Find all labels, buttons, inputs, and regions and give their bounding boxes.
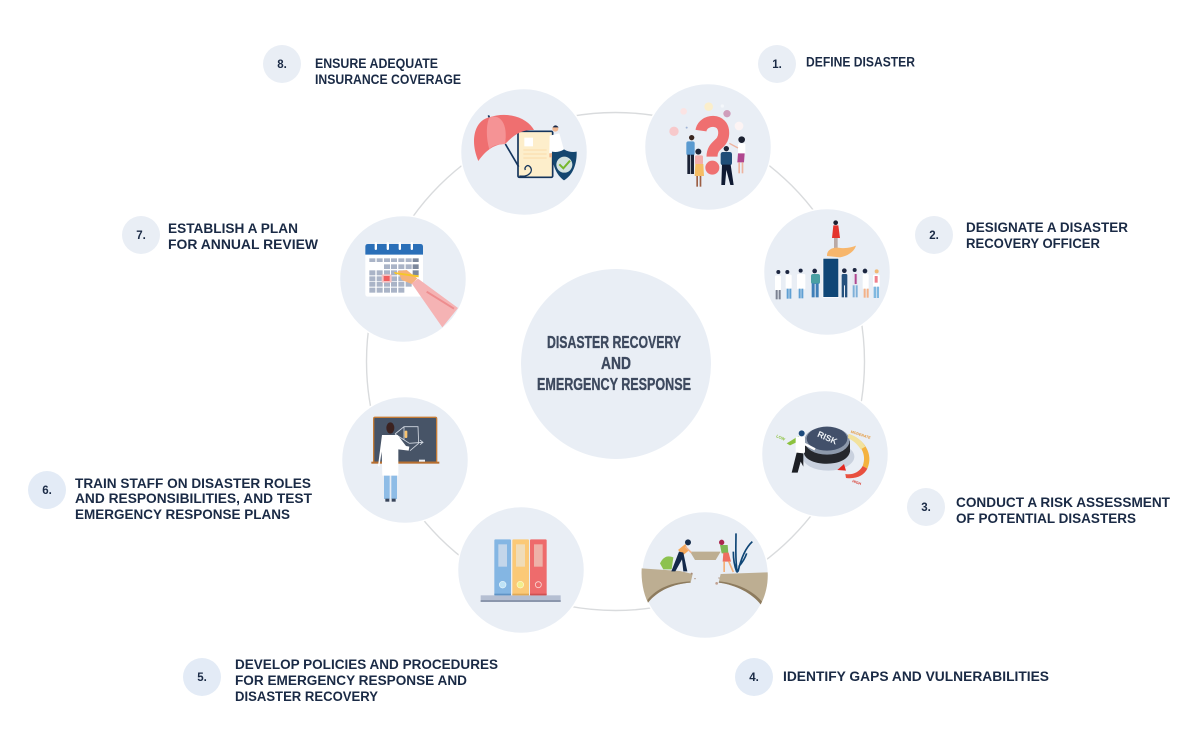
step 3: conduct a risk assessment <box>762 390 1171 526</box>
step 5: develop policies and procedures <box>183 506 584 704</box>
step 1: define disaster <box>644 45 915 210</box>
label 7: FOR ANNUAL REVIEW <box>168 237 318 252</box>
number badge 5: 5. <box>197 672 207 684</box>
central title: AND <box>601 353 631 373</box>
number badge 6: 6. <box>42 485 52 497</box>
icon: people around a question mark <box>669 102 745 187</box>
number badge 4: 4. <box>749 672 759 684</box>
label 8 <box>315 56 461 87</box>
step 7: establish a plan <box>122 216 466 342</box>
label 2 <box>966 220 1128 251</box>
icon: risk dial: MODERATE <box>850 430 872 440</box>
label 4: IDENTIFY GAPS AND VULNERABILITIES <box>783 669 1049 684</box>
number badge 2 <box>915 216 953 254</box>
icon: calendar and hand with pencil <box>365 242 458 327</box>
number badge 3: 3. <box>921 502 931 514</box>
circle 3 <box>762 390 888 518</box>
circle 5 <box>458 506 584 634</box>
step 2: designate a disaster recovery officer <box>764 208 1128 336</box>
number badge 1 <box>758 45 796 83</box>
central title: DISASTER RECOVERY <box>547 332 681 352</box>
circle 4 <box>642 512 768 638</box>
label 5 <box>235 657 498 704</box>
circle 8 <box>460 88 588 216</box>
label 8: INSURANCE COVERAGE <box>315 72 461 87</box>
connecting ring <box>366 112 864 610</box>
label 3: CONDUCT A RISK ASSESSMENT <box>956 495 1171 510</box>
central hub <box>521 269 711 459</box>
number badge 7 <box>122 216 160 254</box>
label 5: DEVELOP POLICIES AND PROCEDURES <box>235 657 498 672</box>
number badge 4 <box>735 658 773 696</box>
central title <box>537 332 691 394</box>
central title: EMERGENCY RESPONSE <box>537 374 691 394</box>
label 5: DISASTER RECOVERY <box>235 689 378 704</box>
icon: risk dial: LOW <box>775 433 786 442</box>
step 4: identify gaps and vulnerabilities <box>642 512 1049 696</box>
number badge 3 <box>907 488 945 526</box>
circle 2 <box>764 208 890 336</box>
icon: umbrella, clipboard and shield <box>474 115 577 180</box>
icon: risk dial <box>775 427 872 486</box>
icon: risk dial: RISK <box>816 429 840 447</box>
label 2: RECOVERY OFFICER <box>966 236 1100 251</box>
number badge 5 <box>183 658 221 696</box>
circle 7 <box>340 216 466 342</box>
number badge 8 <box>263 45 301 83</box>
label 6: TRAIN STAFF ON DISASTER ROLES <box>75 476 311 491</box>
icon: officer on a raised hand above the team <box>775 220 880 299</box>
label 1: DEFINE DISASTER <box>806 54 915 70</box>
circle 6 <box>342 396 468 524</box>
step 6: train staff <box>28 396 468 524</box>
icon: two people bridging a gap <box>642 533 768 604</box>
label 3: OF POTENTIAL DISASTERS <box>956 511 1136 526</box>
icon: trainer at a chalkboard <box>371 417 439 502</box>
circle 1 <box>644 84 772 210</box>
label 7: ESTABLISH A PLAN <box>168 221 298 236</box>
number badge 6 <box>28 471 66 509</box>
label 8: ENSURE ADEQUATE <box>315 56 438 71</box>
label 3 <box>956 495 1171 526</box>
label 6 <box>75 476 313 522</box>
step 8: ensure adequate insurance coverage <box>263 45 588 216</box>
icon: binders on a shelf <box>481 539 561 602</box>
label 6: EMERGENCY RESPONSE PLANS <box>75 507 290 522</box>
number badge 2: 2. <box>929 230 939 242</box>
number badge 7: 7. <box>136 230 146 242</box>
label 5: FOR EMERGENCY RESPONSE AND <box>235 673 467 688</box>
icon: risk dial: HIGH <box>852 479 862 486</box>
label 6: AND RESPONSIBILITIES, AND TEST <box>75 491 313 506</box>
label 2: DESIGNATE A DISASTER <box>966 220 1128 235</box>
label 7 <box>168 221 318 252</box>
number badge 8: 8. <box>277 59 287 71</box>
number badge 1: 1. <box>772 59 782 71</box>
